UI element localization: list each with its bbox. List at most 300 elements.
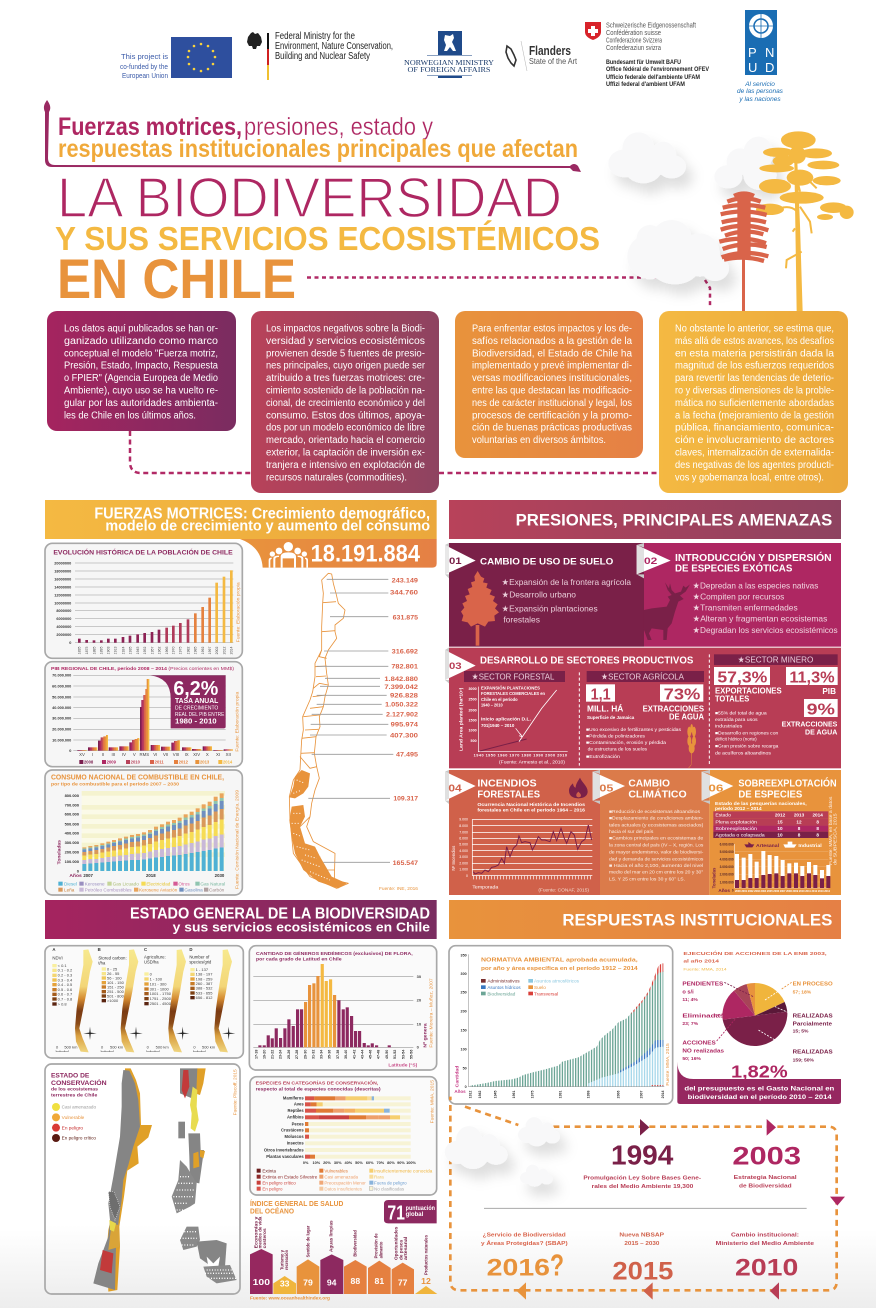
heading: conservacion: de los ecosistemas (51, 1087, 99, 1092)
panel: 02 especies exoticas: ★Alteran y fragmentan ecosistemas (693, 614, 828, 624)
chart: incendios: Nº Incendios (451, 846, 456, 871)
table: pesquerias: Agotada o colapsada (715, 832, 765, 838)
label: forestal x axis (474, 754, 567, 764)
labels: ocean index categories: Provisión de (374, 1233, 379, 1258)
logo: Swiss Confederation: Schweizerische Eidgenossenschaft (606, 22, 696, 30)
bars: ocean index values: 33 (280, 1279, 290, 1289)
map A NDVI: 0.3 - 0.4 (58, 977, 73, 982)
title: drivers line: presiones, estado y (244, 113, 433, 141)
label: regional populations: 243.149 (392, 577, 418, 584)
chart: incendios: 3.000 (459, 855, 468, 859)
legend: artesanal e industrial: Artesanal (756, 843, 779, 848)
bars: ocean index values: 94 (327, 1278, 337, 1288)
milestone: 2003: de Biodiversidad (739, 1184, 792, 1190)
chart: population history: EVOLUCIÓN HISTÓRICA DE LA POBLACIÓN DE CHILE (53, 548, 233, 557)
legend: fuels: Carbón (209, 887, 225, 892)
panel: estado de conservacion: Fuente: Pliscoff, 2015 (233, 1069, 238, 1115)
panel: intro box 2: versidad y servicios ecosistémicos (266, 336, 425, 347)
chart: normativa ambiental: 150 (461, 1028, 467, 1032)
logo: Norwegian Ministry of Foreign Affairs: NORWEGIAN MINISTRY (404, 58, 495, 67)
callout: 6,2% tasa anual (150, 675, 226, 728)
logo: German Federal Ministry: Environment, Nature Conservation, (275, 41, 393, 52)
callout: 6,2% tasa anual: TASA ANUAL (175, 696, 219, 705)
legend: PIB years: 2013 (200, 760, 210, 765)
chart: fuel consumption: Fuente: Comisión Nacional de Energía, 2009 (235, 790, 240, 889)
chart: especies en categorias: 20% (323, 1161, 331, 1165)
chart: normativa ambiental: 2007 (639, 1091, 643, 1098)
panel: intro box 4: vos y gobernanza local, entre otros). (675, 472, 824, 483)
chart: incendios: 2.000 (459, 862, 468, 866)
chart: ejecucion de acciones ENB: REALIZADAS (793, 1050, 833, 1056)
table: pesquerias: 12 (796, 819, 802, 824)
legend: PIB years: 2011 (155, 760, 164, 765)
chart: ejecucion de acciones ENB: PENDIENTES (682, 982, 724, 988)
logo: PNUD: Al servicio (744, 81, 775, 88)
sub-panel: sector agricola: de estructura de los suelos (588, 746, 648, 751)
chart: PIB regional: XII (226, 752, 231, 757)
title: drivers line: Fuerzas motrices, (58, 113, 242, 141)
sub-panel: sector minero: de acuíferos altoandinos (715, 751, 772, 756)
label: regional populations (384, 577, 418, 867)
map D species: 388 - 532 (196, 986, 213, 991)
bars: ocean index values: 88 (351, 1276, 360, 1286)
chart: capturas (712, 842, 831, 893)
chart: fuel consumption: 100.000 (65, 859, 80, 864)
chart: PIB regional (45, 662, 242, 767)
logo: PNUD: de las personas (737, 88, 784, 95)
panel: intro box 2: cional, de crecimiento económico y del (266, 398, 425, 409)
map C agriculture: 0 (147, 1044, 150, 1049)
chart: PIB regional: 60.000.000 (52, 684, 71, 688)
panel: intro box 3: voluntarias en diversos ámbitos. (472, 435, 606, 446)
chart: generos endemicos: 41-42 (352, 1050, 356, 1059)
chart: PIB regional: I (92, 752, 93, 757)
chart: incendios: 6.000 (459, 837, 468, 841)
legend: PIB years: 2009 (107, 760, 117, 765)
logo: German Federal Ministry: Building and Nuclear Safety (275, 51, 370, 62)
legend: fuels: Gasolina (184, 887, 203, 892)
map B carbon: 500 km (110, 1044, 124, 1049)
logo: PNUD: U (748, 60, 757, 75)
heading: fuerzas motrices: FUERZAS MOTRICES: Crecimiento demográfico, (94, 505, 430, 522)
map B carbon: 0 (101, 1044, 104, 1049)
panel: 02 especies exoticas: INTRODUCCIÓN Y DISPERSIÓN (675, 552, 832, 564)
milestone: 2003: 2003 (732, 1142, 801, 1170)
heading: presiones: PRESIONES, PRINCIPALES AMENAZAS (516, 511, 832, 530)
panel: intro box 4: pública, financiamiento, comunica- (675, 423, 834, 434)
panel: 01 cambio de uso de suelo: forestales (503, 614, 541, 624)
milestone: 2015 (612, 1233, 674, 1285)
chart: fuel consumption: 200.000 (65, 850, 80, 855)
panel: 04 incendios forestales: FORESTALES (477, 789, 541, 800)
legend: categories: Rara (374, 1174, 384, 1179)
logo: PNUD: N (765, 45, 774, 60)
chart: ejecucion de acciones ENB: o s/i (682, 989, 694, 995)
legend: PIB years: 2008 (84, 760, 94, 765)
chart: normativa ambiental: 0 (465, 1085, 467, 1089)
chart: PIB regional: 70.000.000 (52, 674, 71, 678)
panel: intro box 2: dos por un modelo económico de libre (266, 423, 425, 434)
chart: incendios: 7.000 (459, 831, 468, 835)
map A NDVI: 0.1 - 0.2 (58, 968, 73, 973)
chart: PIB regional: IV (122, 752, 126, 757)
chart: generos endemicos: 53-54 (401, 1049, 405, 1059)
chart: PIB regional: V (133, 752, 136, 757)
bars: ocean index values (250, 1249, 437, 1294)
panel: intro box 4: más allá de estos avances, los desafíos (675, 336, 834, 347)
chart: population history: 1982 (186, 647, 190, 654)
title: en Chile: EN CHILE (57, 247, 296, 310)
panel: 06 sobreexplotacion de especies: DE ESPECIES (738, 789, 803, 800)
callout: 6,2% tasa anual: 1980 - 2010 (175, 719, 217, 726)
chart: especies en categorias: Fuente: MMA, 2015 (429, 1080, 434, 1123)
table: pesquerias: 15 (777, 819, 783, 824)
milestone: 2010: Ministerio del Medio Ambiente (716, 1241, 814, 1247)
milestone: 2016: 2016 (487, 1255, 550, 1282)
labels: ocean index categories: alimento (378, 1241, 383, 1258)
chart: generos endemicos: 23-24 (279, 1049, 283, 1059)
icon: tree (461, 571, 499, 646)
chart: incendios: Temporada (472, 884, 499, 889)
chart: ejecucion de acciones ENB: Fuente: MMA, 2014 (683, 967, 728, 972)
map D species (189, 947, 235, 1052)
logo: Swiss Confederation: Confederaziun svizra (606, 45, 661, 52)
chart: incendios: 1.000 (459, 868, 468, 872)
chart: ejecucion de acciones ENB: al año 2014 (683, 959, 719, 965)
pie chart (722, 983, 787, 1046)
callout: 71 puntuacion global: 71 (387, 1202, 405, 1224)
legend: normativa: Asuntos atmosféricos (534, 979, 580, 984)
chart: population history: 1935 (128, 647, 132, 654)
chart: PIB regional: 20.000.000 (52, 728, 71, 732)
panel: intro box 2: cimiento sostenido de la población na- (266, 386, 425, 396)
chart: PIB regional: 0 (69, 749, 71, 753)
sub-panel: sector minero: 11,3% (789, 669, 835, 686)
labels: ocean index categories: Turismo y (279, 1249, 284, 1270)
panel: 05 cambio climatico (593, 770, 709, 895)
heading: estado general: ESTADO GENERAL DE LA BIODIVERSIDAD (130, 905, 430, 922)
panel: intro box 4: ro y diversas dimensiones de la proble- (675, 386, 834, 396)
panel: 02 especies exoticas: DE ESPECIES EXÓTICAS (675, 563, 793, 575)
milestone: 2010: Cambio institucional: (731, 1232, 799, 1238)
table: pesquerias: 8 (798, 832, 801, 837)
sub-panel: sector forestal: Land Area planted (ha*10³) (458, 687, 463, 751)
chart: generos endemicos: 31-32 (311, 1050, 315, 1059)
label: regional populations: 926.828 (390, 692, 418, 699)
panel: 02 especies exoticas (637, 543, 841, 647)
chart: fuel consumption: Toneladas (57, 840, 63, 864)
map B carbon (98, 947, 143, 1052)
arrows (517, 1119, 845, 1300)
sub-panel: sector minero: ★SECTOR MINERO (738, 654, 814, 664)
table: pesquerias: Sobreexplotación (715, 826, 757, 832)
panel: 06 sobreexplotacion de especies: período 2012 – 2014 (715, 806, 762, 811)
milestone: 2016: ¿Servicio de Biodiversidad (483, 1233, 566, 1239)
chart: normativa ambiental: 1912 (469, 1091, 473, 1098)
label: regional populations: 316.692 (392, 648, 418, 655)
chart: PIB regional: VI (153, 752, 157, 757)
panel: 05 cambio climatico: la zona central del país (IV – X, región. Los (609, 843, 704, 848)
legend: categories: En peligro crítico (262, 1180, 296, 1185)
chart: PIB regional: XI (216, 752, 220, 757)
panel: intro box 1: les de Chile en los últimos años. (64, 410, 196, 421)
heading: conservacion: ESTADO DE (51, 1073, 90, 1080)
callout: 6,2% tasa anual: REAL DEL PIB ENTRE (175, 712, 225, 718)
chart: normativa ambiental: Fuente: MMA, 2015 (665, 1043, 670, 1086)
sub-panel: sector minero: ■Gran presión sobre recarga (715, 743, 779, 748)
map D species: 138 - 197 (196, 972, 213, 977)
icon: yellow tree (756, 131, 854, 312)
chart: ocean health index: DEL OCÉANO (250, 1206, 295, 1215)
timeline (450, 1097, 845, 1300)
chart: generos endemicos: Fuente: Moreira – Muñoz, 2007 (429, 978, 434, 1048)
logo: Flanders: Flanders (529, 43, 571, 58)
map: conservation status north (93, 1068, 152, 1292)
bars: ocean index values: 81 (375, 1276, 384, 1286)
chart: PIB regional: XIV (193, 752, 200, 757)
bars: ocean index values: 77 (398, 1278, 408, 1288)
legend: fuels: Gas Licuado (113, 881, 139, 886)
panel: 06 sobreexplotacion de especies (702, 770, 841, 895)
label: regional populations: 782.801 (391, 664, 418, 671)
chart: population history: 1952 (143, 647, 147, 654)
chart: ejecucion de acciones ENB: 159; 50% (793, 1058, 815, 1064)
panel: intro box 4: des negativas de los agentes producti- (675, 460, 834, 471)
sub-panel: sector agricola: EXTRACCIONES (643, 704, 704, 714)
chart: ocean health index: Fuente: www.oceanhealthindex.org (250, 1296, 330, 1301)
chart: fuel consumption: por tipo de combustible para el período 2007 – 2030 (51, 782, 179, 787)
sub-panel: sector forestal: 701|1940 – 2010 (481, 723, 515, 729)
chart: population history: 1957 (150, 647, 154, 654)
chart: especies en categorias: 70% (376, 1161, 385, 1165)
chart: population history: 1875 (85, 647, 89, 654)
chart: ejecucion de acciones ENB: 15; 5% (793, 1029, 809, 1035)
panel: 05 cambio climatico: hacia el sur del país (609, 829, 654, 834)
sub-panel: sector forestal: 3000 (469, 687, 477, 691)
panel: 04 incendios forestales: INCENDIOS (477, 779, 537, 790)
legend: PIB years: 2014 (223, 760, 233, 765)
chart: generos endemicos: 39-40 (344, 1050, 348, 1059)
panel: 04 incendios forestales: forestales en Chile en el período 1964 – 2016 (477, 807, 585, 812)
logo: Norwegian Ministry of Foreign Affairs: OF FOREIGN AFFAIRS (408, 65, 490, 74)
panel: intro box 3: ción de buenas prácticas productivas (472, 423, 632, 434)
panel: intro box 3 (455, 311, 643, 458)
legend: fuels: Electricidad (146, 881, 171, 886)
chart: capturas: 6.000.000 (720, 842, 734, 846)
label: regional populations: 47.495 (396, 751, 418, 758)
sub-panel: sector minero: TOTALES (715, 694, 750, 704)
panel: intro box 1: o FPIER" (Agencia Europea de Medio (64, 373, 218, 384)
chart: population history: 1992 (201, 647, 205, 654)
map A NDVI: A (52, 947, 56, 952)
chart: generos endemicos: 17-18 (254, 1050, 258, 1059)
chart: ejecucion de acciones ENB: 57; 18% (793, 989, 812, 995)
legend: fuels: Diesel (64, 881, 77, 886)
milestone: 2015: 2015 (612, 1258, 674, 1285)
chart: population history: 16000000 (54, 577, 71, 581)
chart: normativa ambiental: 1998 (586, 1091, 590, 1098)
logo: Flanders (506, 41, 578, 71)
labels: ocean index categories: de pesca (398, 1239, 403, 1260)
chart: normativa ambiental: 1945 (494, 1091, 498, 1098)
chart: normativa ambiental: 50 (463, 1066, 467, 1070)
chart: generos endemicos: 37-38 (336, 1050, 340, 1059)
chart: normativa ambiental: 350 (461, 953, 467, 957)
heading: conservacion: CONSERVACIÓN (51, 1078, 107, 1087)
chart: population history: 1970 (172, 647, 176, 654)
panel: 01 cambio de uso de suelo: ★Expansión de la frontera agrícola (502, 577, 631, 587)
icon: deer (644, 582, 690, 640)
label: regional populations: 1.842.880 (384, 676, 418, 683)
legend: conservation status: En peligro (62, 1125, 83, 1131)
legend: conservation status: Casi amenazado (62, 1105, 96, 1111)
sub-panel: sector agricola: Superficie de Jamaica (587, 715, 635, 720)
logo: European Union: This project is (121, 52, 168, 61)
chart: fuel consumption: 800.000 (65, 793, 80, 798)
chart: especies en categorias: Moluscos (284, 1134, 304, 1139)
panel: 05 cambio climatico: ■Desplazamiento de condiciones ambien- (609, 816, 704, 821)
legend: categories: Datos insuficientes (324, 1186, 363, 1191)
table: pesquerias: 2013 (794, 812, 805, 817)
legend: categories: Insuficientemente conocida (374, 1168, 433, 1173)
chart: PIB regional: 40.000.000 (52, 706, 71, 710)
milestone: 2010: 2010 (735, 1255, 798, 1282)
chart: especies en categorias: Insectos (287, 1141, 304, 1146)
chart: population history: 2002 (215, 647, 219, 654)
chart: especies en categorias: 100% (406, 1161, 416, 1165)
map B carbon: >1000 (107, 998, 119, 1003)
chart: PIB regional: Fuente: Elaboración propia (235, 691, 240, 752)
map A NDVI: 500 km (64, 1044, 78, 1049)
chart: capturas: 4.000.000 (720, 858, 734, 862)
chart: generos endemicos: 47-48 (377, 1050, 381, 1059)
chart: normativa ambiental: por año y área específica en el período 1912 – 2014 (481, 966, 638, 972)
sub-panel: sector minero: PIB (822, 686, 836, 696)
panel: estado de conservacion (45, 1064, 240, 1294)
map: Chile population by region: Fuente: INE, 2016 (379, 886, 419, 891)
legend: normativa: Transversal (534, 991, 558, 996)
chart: especies en categorias: Aves (294, 1102, 304, 1107)
chart: generos endemicos: 43-44 (360, 1049, 364, 1059)
chart: especies en categorias (250, 1077, 437, 1195)
title: servicios ecosistemicos: Y SUS SERVICIOS ECOSISTÉMICOS (55, 220, 600, 257)
chart: fuel consumption: Años (69, 873, 82, 879)
panel: 02 especies exoticas: ★Depredan a las especies nativas (693, 581, 819, 591)
label: regional populations: 995.974 (391, 722, 418, 729)
panel: 05 cambio climatico: tales actuales (y ecosistemas asociados) (609, 822, 704, 827)
heading: fuerzas motrices: modelo de crecimiento y aumento del consumo (105, 519, 430, 535)
chart: population history: 6000000 (56, 617, 71, 621)
icon: orange araucaria tree (719, 193, 768, 312)
map D species: D (189, 947, 192, 952)
legend: artesanal e industrial (744, 842, 822, 848)
chart: population history: 8000000 (56, 609, 71, 613)
legend: categories: En peligro (262, 1186, 283, 1191)
map C agriculture (144, 947, 189, 1052)
chart: fuel consumption: 2018 (146, 873, 156, 878)
sub-panel: sector agricola: ■Contaminación, erosión y pérdida (586, 740, 667, 745)
map C agriculture: 0 (150, 971, 153, 976)
chart: normativa ambiental: Años (454, 1089, 466, 1094)
sub-panel: sector agricola: DE AGUA (669, 711, 704, 721)
chart: incendios: 4.000 (459, 849, 468, 853)
panel: intro box 3: implementado y prevé implementar di- (472, 361, 632, 372)
sub-panel: sector minero: extraída para usos (715, 717, 759, 722)
table: pesquerias: Estado (715, 812, 731, 818)
map B carbon: 0 - 25 (107, 966, 118, 971)
table: pesquerias: 8 (816, 826, 819, 831)
chart: generos endemicos: 51-52 (393, 1050, 397, 1059)
panel: 05 cambio climatico: ■Reducción de ecosistemas altoandinos (609, 809, 701, 814)
chart: population history: 10000000 (54, 601, 71, 605)
logo: PNUD: P (748, 45, 757, 60)
clouds: timeline (445, 1117, 560, 1187)
label: regional populations: 109.317 (393, 796, 418, 803)
chart: normativa ambiental: 300 (461, 972, 467, 976)
chart: fuel consumption: 400.000 (65, 831, 80, 836)
map A NDVI: < 0.1 (58, 963, 67, 968)
sub-panel: sector minero (714, 654, 838, 756)
map A NDVI: 0 (56, 1044, 59, 1049)
chart: normativa ambiental: 2006 (616, 1091, 620, 1098)
sub-panel: sector minero: DE AGUA (805, 727, 838, 736)
legend: conservation status: En peligro crítico (62, 1136, 96, 1142)
chart: ejecucion de acciones ENB: NO realizadas (682, 1048, 724, 1054)
panel: intro box 4: ción e involucramiento de actores (675, 435, 834, 446)
sub-panel: sector forestal: Chile en el período (481, 697, 518, 702)
sub-panel: sector minero: 57,3% (717, 669, 767, 686)
chart: normativa ambiental: 1942 (478, 1091, 482, 1098)
panel: 05 cambio climatico: LS. Y 25 cm entre los 30 y 60° LS. (609, 877, 685, 882)
section: species and ocean (250, 1077, 437, 1301)
chart: PIB regional: III (112, 752, 115, 757)
heading: respuestas: RESPUESTAS INSTITUCIONALES (562, 911, 832, 930)
chart: fuel consumption: 0 (77, 868, 80, 873)
chart: population history: 1924 (121, 647, 125, 654)
chart: capturas: 1.000.000 (720, 880, 734, 884)
panel: ecosystem service maps (45, 946, 243, 1058)
sub-panel: sector agricola: ■Eutrofización (586, 754, 621, 759)
chart: incendios: 0 (466, 874, 468, 878)
panel: 06 sobreexplotacion de especies: Fuente: MMA, en base a datos (828, 797, 833, 865)
sub-panel: sector agricola: 1,1 (591, 687, 611, 704)
sub-panel: sector forestal: 2500 (469, 698, 477, 702)
chart: especies en categorias: 40% (344, 1161, 353, 1165)
chart: generos endemicos: 29-30 (303, 1050, 307, 1059)
chart: capturas: 0 (732, 888, 734, 892)
chart: generos endemicos: 20 (417, 998, 422, 1003)
legend: normativa (481, 979, 580, 996)
chart: especies en categorias: Peces (292, 1121, 304, 1126)
callout: population total: 18.191.884 (311, 541, 421, 568)
chart: especies en categorias: Plantas vasculares (266, 1154, 304, 1159)
chart: especies en categorias: 10% (312, 1161, 321, 1165)
logo: European Union (120, 37, 232, 80)
map C agriculture: 101 - 300 (150, 981, 167, 986)
sub-panel: sector agricola: 73% (664, 687, 700, 704)
section: fuerzas motrices (45, 500, 437, 895)
labels: ocean index categories: costeros (262, 1228, 267, 1248)
logo: Swiss Confederation: Bundesamt für Umwelt BAFU (606, 59, 681, 66)
heading: respuestas (449, 900, 841, 939)
chart: population history: 1895 (100, 647, 104, 654)
chart: especies en categorias: Mamíferos (283, 1096, 304, 1101)
panel: 05 cambio climatico: dad y demanda de servicios ecosistémicos (609, 856, 704, 861)
labels: ocean index categories: medios de vida (258, 1216, 263, 1248)
section: forestal footers and panels 04-06 (445, 754, 841, 895)
chart: population history: 1997 (208, 647, 212, 654)
panel: intro box 1: Los datos aquí publicados se han or- (64, 324, 218, 334)
